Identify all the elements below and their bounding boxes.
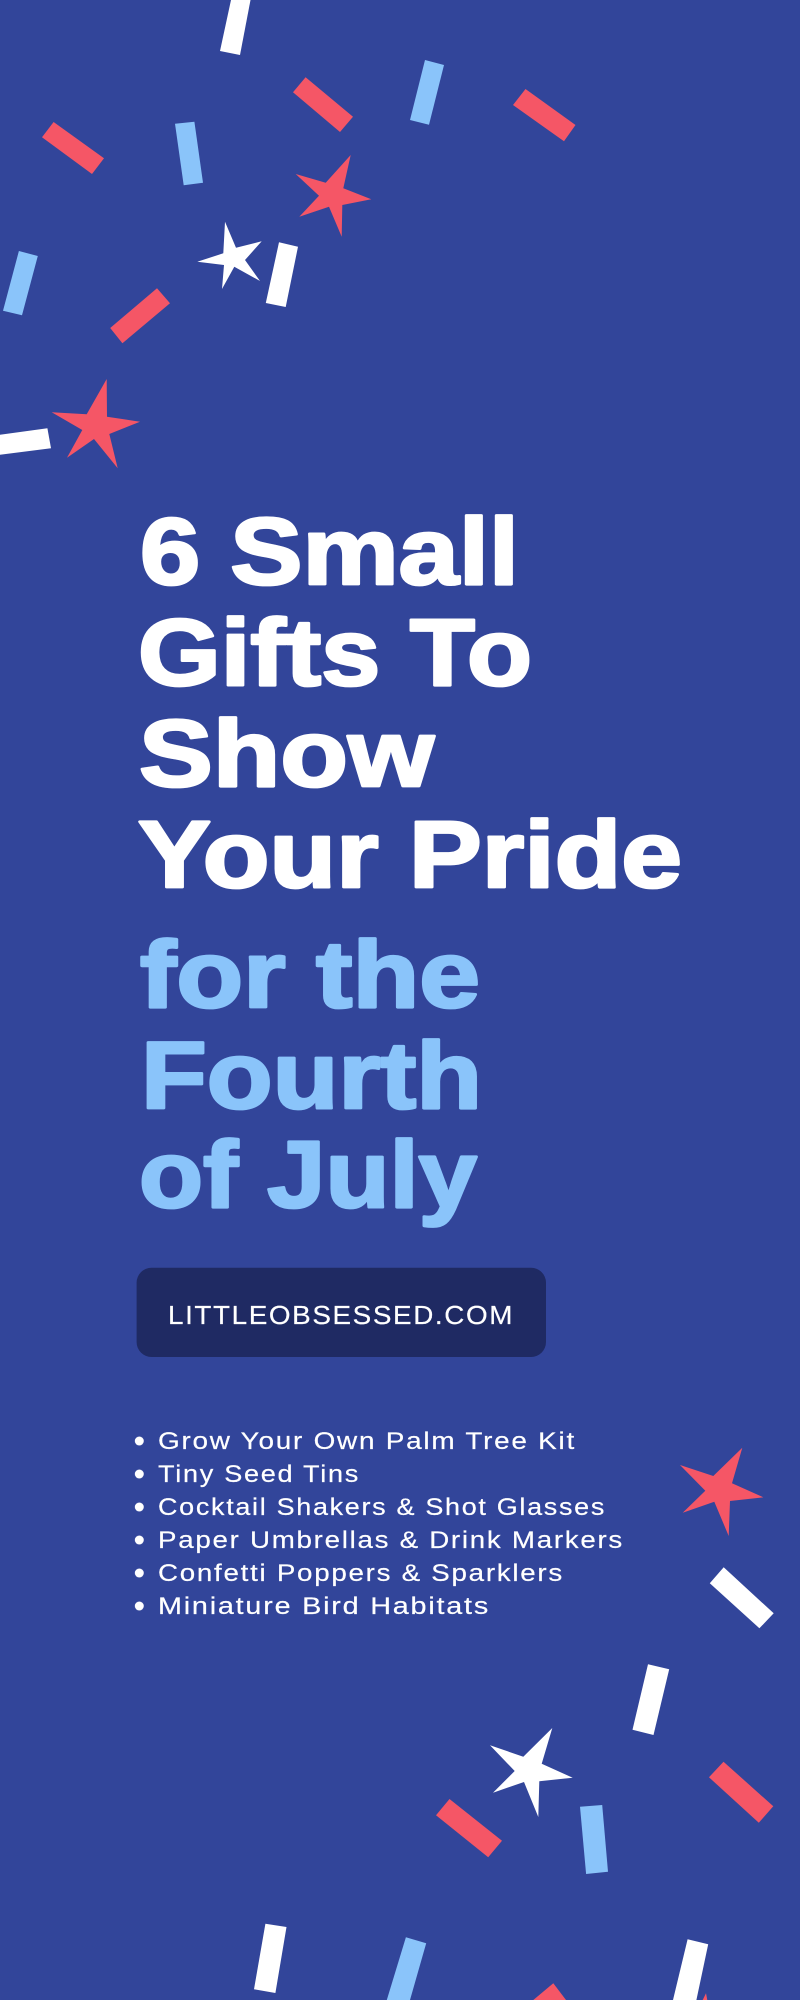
icon: white star: [490, 1728, 573, 1817]
confetti: red strip: [293, 77, 353, 132]
bullet list of gifts: Paper Umbrellas & Drink Markers: [158, 1527, 624, 1554]
confetti: white strip, centre: [266, 242, 298, 307]
website badge: LITTLEOBSESSED.COM: [168, 1300, 514, 1330]
title: white heading: 6 Small: [140, 499, 519, 605]
confetti: blue strip, centre: [175, 122, 203, 185]
confetti: red strip, cut off at bottom: [533, 1983, 566, 2000]
confetti: white strip, right: [710, 1567, 774, 1628]
bullet list of gifts: Tiny Seed Tins: [158, 1461, 360, 1488]
confetti: white strip, top: [220, 0, 250, 55]
subtitle: light blue heading: of July: [139, 1122, 477, 1228]
title: white heading: Your Pride: [138, 802, 682, 908]
website badge: [137, 1268, 546, 1357]
subtitle: light blue heading: Fourth: [141, 1023, 482, 1129]
bottom confetti cluster: [254, 1448, 774, 2000]
icon: red star, right: [680, 1448, 763, 1536]
confetti: blue strip, left edge: [3, 251, 38, 315]
confetti: blue strip, centre: [580, 1805, 608, 1874]
confetti: red strip, lower: [110, 288, 170, 343]
title: white heading: Gifts To: [138, 600, 532, 706]
title: white heading: [138, 499, 682, 908]
bullet list of gifts: Cocktail Shakers & Shot Glasses: [158, 1494, 606, 1521]
confetti: red strip, centre: [436, 1799, 502, 1857]
confetti: white strip, bottom left: [254, 1924, 286, 1993]
bullet list of gifts: Grow Your Own Palm Tree Kit: [158, 1428, 576, 1455]
icon: large red star: [52, 379, 140, 468]
confetti: red strip, right: [709, 1762, 773, 1823]
confetti: white strip, bottom right: [673, 1939, 708, 2000]
title: white heading: Show: [139, 701, 435, 807]
confetti: white strip, left edge: [0, 428, 51, 455]
subtitle: light blue heading: [139, 922, 482, 1228]
subtitle: light blue heading: for the: [140, 922, 480, 1028]
confetti: white strip: [632, 1664, 669, 1735]
bullet list of gifts: [135, 1428, 624, 1620]
bullet list of gifts: Miniature Bird Habitats: [158, 1593, 490, 1620]
confetti: red strip, left: [42, 122, 104, 174]
icon: red star: [296, 155, 371, 237]
icon: white star: [197, 222, 262, 289]
bullet list of gifts: Confetti Poppers & Sparklers: [158, 1560, 564, 1587]
top confetti cluster: [0, 0, 576, 468]
icon: red star tip, cut off at bottom: [703, 1993, 707, 2000]
confetti: blue strip: [410, 60, 444, 125]
confetti: red strip, right: [513, 89, 576, 141]
confetti: blue strip, bottom: [387, 1937, 426, 2000]
